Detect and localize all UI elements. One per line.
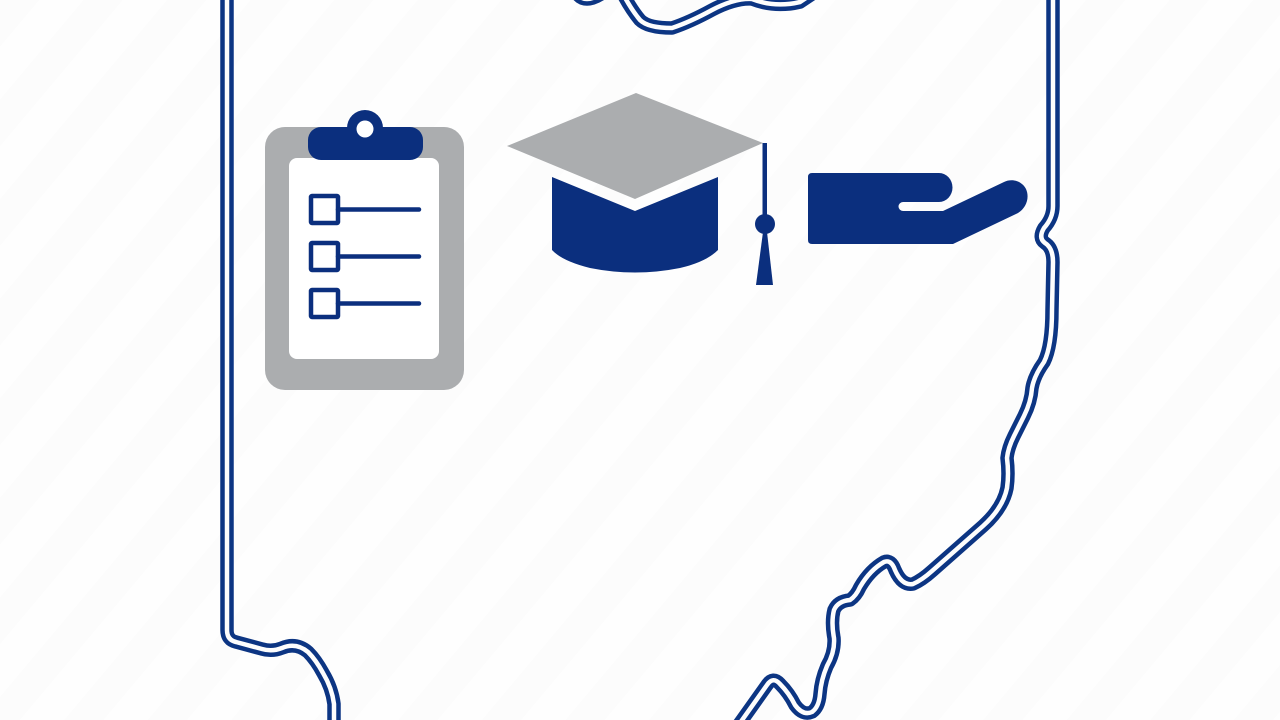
icon: clipboard bbox=[265, 110, 464, 390]
state outline bbox=[227, 0, 1053, 720]
icon: open hand bbox=[808, 173, 1028, 244]
clipboard paper bbox=[289, 158, 439, 359]
cap base bbox=[552, 177, 718, 272]
tassel bbox=[755, 143, 775, 285]
icon: graduation cap bbox=[507, 93, 775, 285]
cap board bbox=[507, 93, 763, 199]
clipboard clip bbox=[308, 110, 423, 160]
clipboard board bbox=[265, 127, 464, 390]
checklist bbox=[311, 196, 419, 317]
